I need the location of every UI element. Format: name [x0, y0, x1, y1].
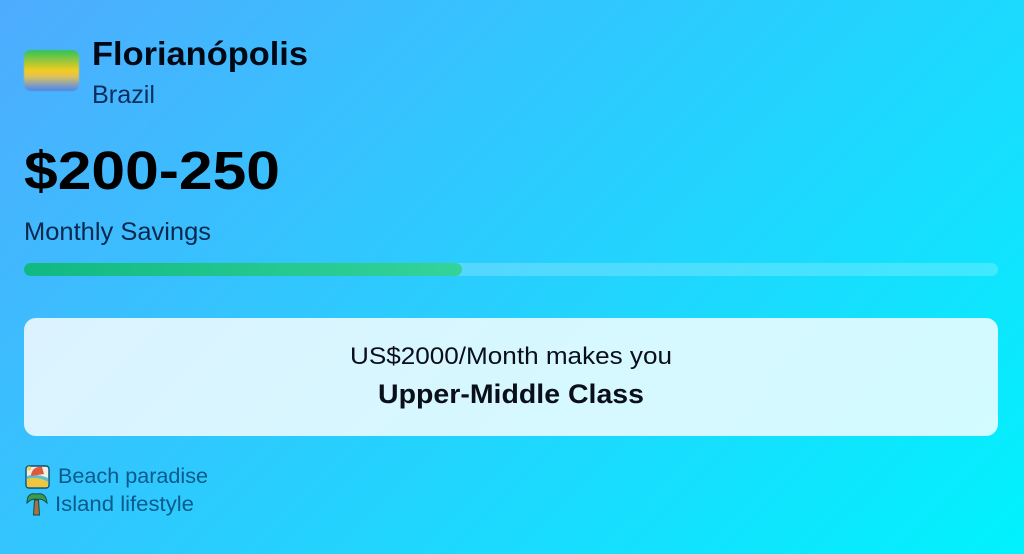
feature list	[26, 465, 208, 516]
icon: Brazil flag gradient	[24, 50, 79, 91]
callout line one: US$2000/Month makes you	[350, 343, 672, 370]
savings amount: $200-250	[24, 141, 280, 201]
progress fill	[24, 263, 462, 276]
icon: palm tree	[27, 494, 47, 515]
callout panel	[24, 318, 998, 436]
feature text: beach paradise: Beach paradise	[58, 465, 208, 488]
callout line two: Upper-Middle Class	[378, 379, 644, 409]
progress bar	[24, 263, 998, 276]
progress track	[24, 263, 998, 276]
savings label: Monthly Savings	[24, 218, 211, 246]
city name: Florianópolis	[92, 35, 308, 72]
header: city and country	[24, 35, 308, 109]
callout: class status	[24, 318, 998, 436]
icon: beach	[26, 466, 49, 488]
feature text: island lifestyle: Island lifestyle	[55, 493, 194, 516]
country name: Brazil	[92, 81, 155, 109]
